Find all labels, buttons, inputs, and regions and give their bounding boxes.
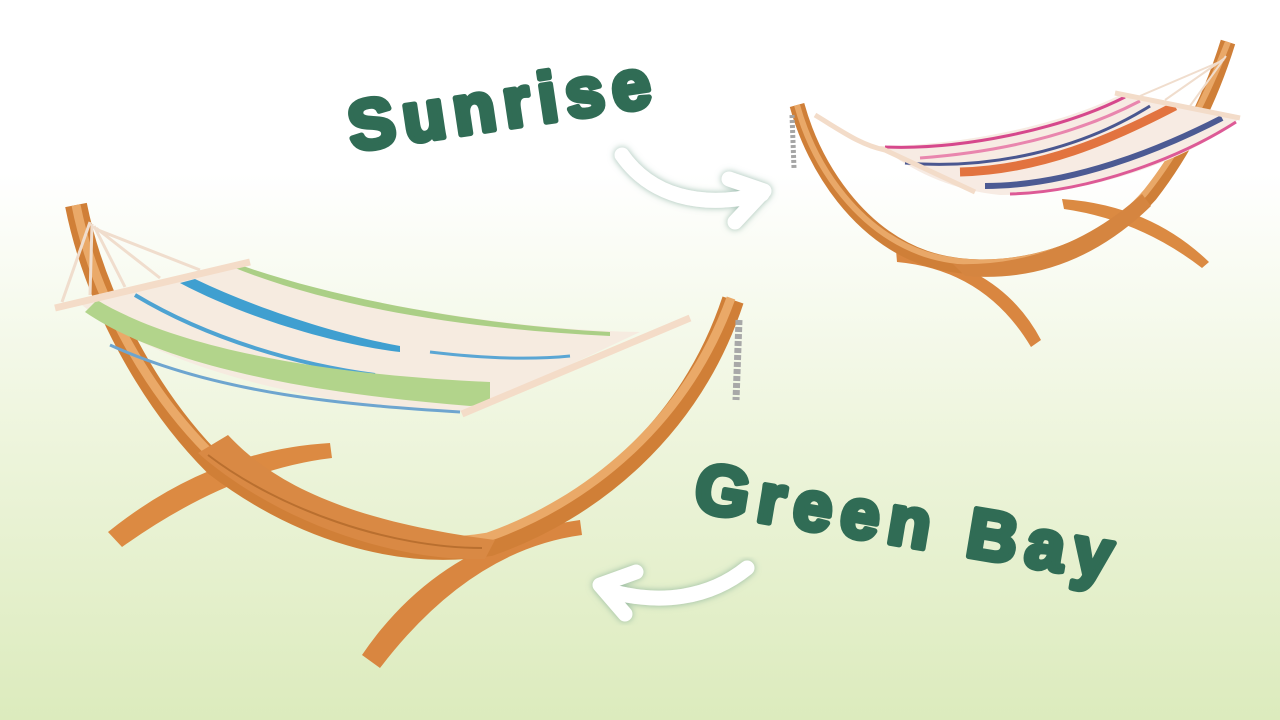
stand arc <box>797 42 1228 267</box>
fabric <box>82 265 640 412</box>
hammock: Sunrise <box>792 42 1240 347</box>
hammock: Green Bay <box>55 205 739 668</box>
chain <box>736 320 739 400</box>
stand joint <box>198 435 495 559</box>
fabric <box>880 95 1240 195</box>
spreader and ropes <box>55 262 250 308</box>
back leg <box>1062 199 1209 268</box>
arrow: Sunrise to small hammock <box>622 155 764 222</box>
label: Green Bay: Green Bay <box>690 448 1128 596</box>
stand joint <box>953 194 1151 277</box>
front leg <box>362 520 582 668</box>
front leg <box>896 250 1041 347</box>
label: Sunrise: Sunrise <box>343 42 664 166</box>
arrow: Green Bay to large hammock <box>600 568 747 614</box>
chain left <box>792 115 794 168</box>
ropes and spreader <box>1115 93 1240 118</box>
back leg <box>108 443 332 547</box>
stand arc <box>76 205 733 549</box>
